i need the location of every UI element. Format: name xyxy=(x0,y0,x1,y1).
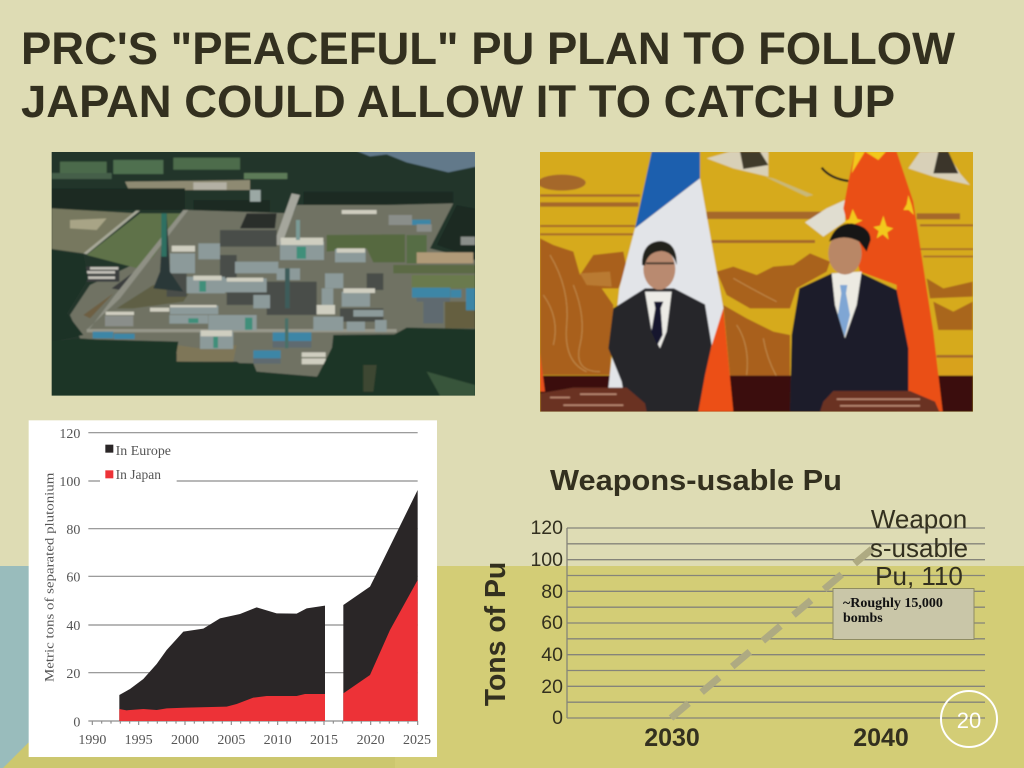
axis labels: 2020 xyxy=(357,733,385,748)
Xi xyxy=(790,273,908,412)
photo: French and Chinese presidents before flags xyxy=(537,148,977,415)
title: PRC'S "PEACEFUL" PU PLAN TO FOLLOW xyxy=(21,23,956,74)
y axis values: 20 xyxy=(541,676,563,698)
axis labels: 2015 xyxy=(310,733,338,748)
axis labels: 2025 xyxy=(403,733,431,748)
x axis years: 2030 xyxy=(644,724,700,752)
y axis values: 60 xyxy=(541,612,563,634)
mountains xyxy=(540,238,627,375)
French flag xyxy=(635,152,700,228)
bar chart: separated plutonium stockpile image xyxy=(29,420,437,757)
y axis values: 0 xyxy=(552,707,563,729)
axis labels: 100 xyxy=(59,475,80,490)
legend: In Japan xyxy=(116,467,161,482)
axis labels: 120 xyxy=(59,427,80,442)
data label: s-usable xyxy=(870,533,968,563)
photo: aerial view of reprocessing plant xyxy=(47,148,480,402)
data label: Pu, 110 xyxy=(875,561,963,591)
axis labels xyxy=(41,427,431,748)
callout xyxy=(833,588,974,640)
axis labels: 2010 xyxy=(264,733,292,748)
slide number badge xyxy=(941,691,997,747)
legend xyxy=(105,443,171,482)
x axis years xyxy=(644,724,909,752)
chart heading: Weapons-usable Pu xyxy=(550,465,842,497)
slide number badge: 20 xyxy=(957,708,981,733)
axis labels: Metric tons of separated plutonium xyxy=(41,473,56,682)
y axis values xyxy=(530,517,563,729)
axis labels: 80 xyxy=(66,523,80,538)
axis labels: 2000 xyxy=(171,733,199,748)
axis labels: 2005 xyxy=(217,733,245,748)
x axis years: 2040 xyxy=(853,724,909,752)
y axis values: 100 xyxy=(530,549,563,571)
axis labels: 1995 xyxy=(125,733,153,748)
grid lines xyxy=(88,433,418,725)
area: in Japan xyxy=(119,580,418,721)
y axis title: Tons of Pu xyxy=(480,562,512,706)
data label: Weapon xyxy=(871,504,967,534)
callout: bombs xyxy=(843,611,883,626)
Chinese flag xyxy=(843,152,943,412)
cranes xyxy=(707,152,768,177)
area: in Europe xyxy=(119,490,418,721)
axis labels: 0 xyxy=(73,715,80,730)
legend: In Europe xyxy=(116,443,171,458)
wall bands xyxy=(538,175,973,358)
grid lines xyxy=(567,528,985,718)
chart panel xyxy=(29,420,437,757)
axis labels: 1990 xyxy=(78,733,106,748)
y axis values: 40 xyxy=(541,644,563,666)
shadows between buildings xyxy=(167,230,383,322)
y axis values: 120 xyxy=(530,517,563,539)
carved chairs xyxy=(540,388,647,412)
axis labels: 40 xyxy=(66,619,80,634)
y axis values: 80 xyxy=(541,581,563,603)
title: JAPAN COULD ALLOW IT TO CATCH UP xyxy=(21,76,895,127)
axis labels: 60 xyxy=(66,571,80,586)
Hollande xyxy=(608,288,712,412)
data label xyxy=(870,504,968,591)
title xyxy=(21,23,956,127)
line chart: weapons-usable Pu xyxy=(480,465,985,752)
dashed trend line xyxy=(671,549,872,718)
axis labels: 20 xyxy=(66,667,80,682)
callout: ~Roughly 15,000 xyxy=(843,596,943,611)
